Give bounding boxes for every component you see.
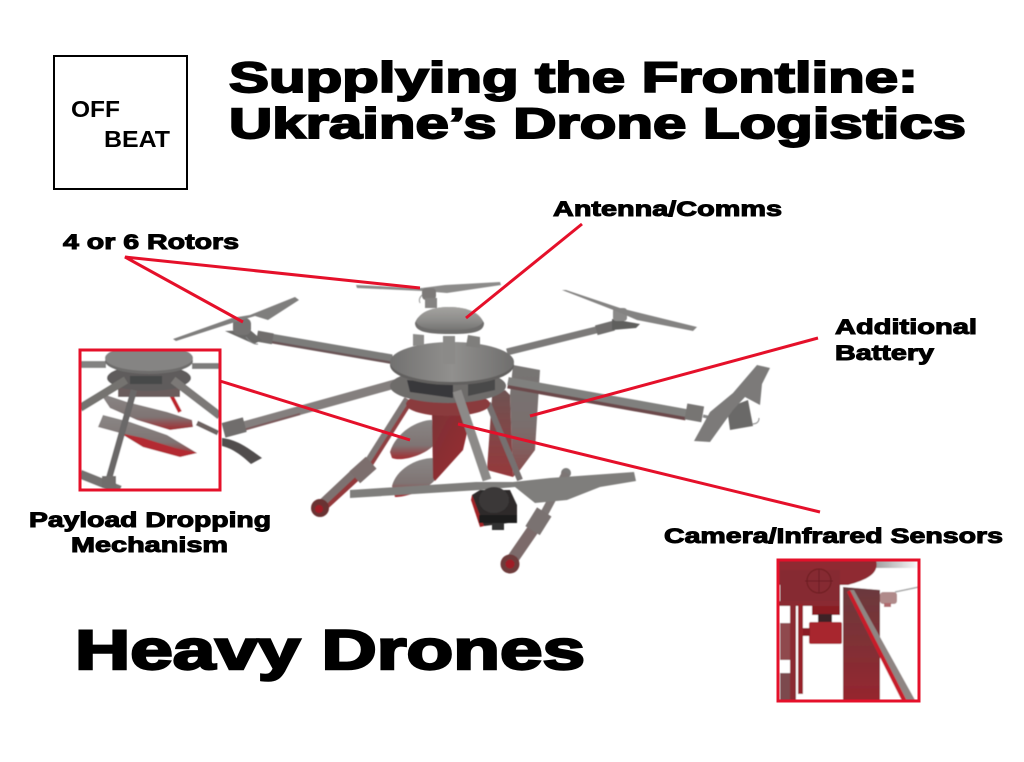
logo: Off Beat (54, 56, 187, 189)
icon: rear-right arm and rotor (507, 290, 697, 352)
label: battery (835, 316, 977, 365)
icon: rear-left arm and rotor (173, 297, 392, 360)
label: payload: Payload Dropping (29, 509, 271, 532)
drone illustration (173, 282, 770, 574)
logo: Off Beat: BEAT (104, 126, 170, 152)
label: camera: Camera/Infrared Sensors (664, 525, 1003, 548)
label: payload (29, 509, 271, 557)
heading: Heavy Drones: Heavy Drones (75, 618, 585, 681)
icon: payload bombs (390, 420, 437, 497)
title: Supplying the Frontline: (229, 54, 918, 102)
icon: rear rotor (356, 282, 501, 308)
logo: Off Beat: OFF (71, 96, 120, 122)
arrow: payload (220, 381, 410, 440)
arrow: camera (458, 424, 820, 512)
icon: right arm and rotor (508, 365, 770, 442)
icon: front-left arm and rotor (205, 382, 402, 472)
label: payload: Mechanism (71, 534, 228, 557)
icon: right landing leg (500, 468, 571, 574)
icon: camera module (471, 487, 517, 530)
label: battery: Battery (835, 342, 934, 365)
icon: mount block (432, 408, 470, 481)
title (229, 54, 966, 148)
title: Ukraine’s Drone Logistics (229, 100, 966, 148)
label: antenna: Antenna/Comms (553, 198, 782, 221)
icon: rear-right leg (488, 403, 520, 480)
inset: payload dropping mechanism (78, 345, 220, 490)
arrow: battery (530, 338, 818, 416)
icon: left landing leg (311, 399, 409, 517)
inset: camera and infrared sensors (778, 560, 920, 701)
label: battery: Additional (835, 316, 977, 339)
arrow: rotors (125, 257, 420, 322)
icon: battery box (487, 365, 540, 477)
label: rotors: 4 or 6 Rotors (63, 231, 239, 254)
icon: front-centre leg (457, 391, 487, 480)
arrow: antenna (466, 224, 582, 318)
icon: central hub (390, 334, 514, 416)
icon: antenna dome (415, 307, 484, 334)
icon: front rotor (350, 472, 636, 503)
